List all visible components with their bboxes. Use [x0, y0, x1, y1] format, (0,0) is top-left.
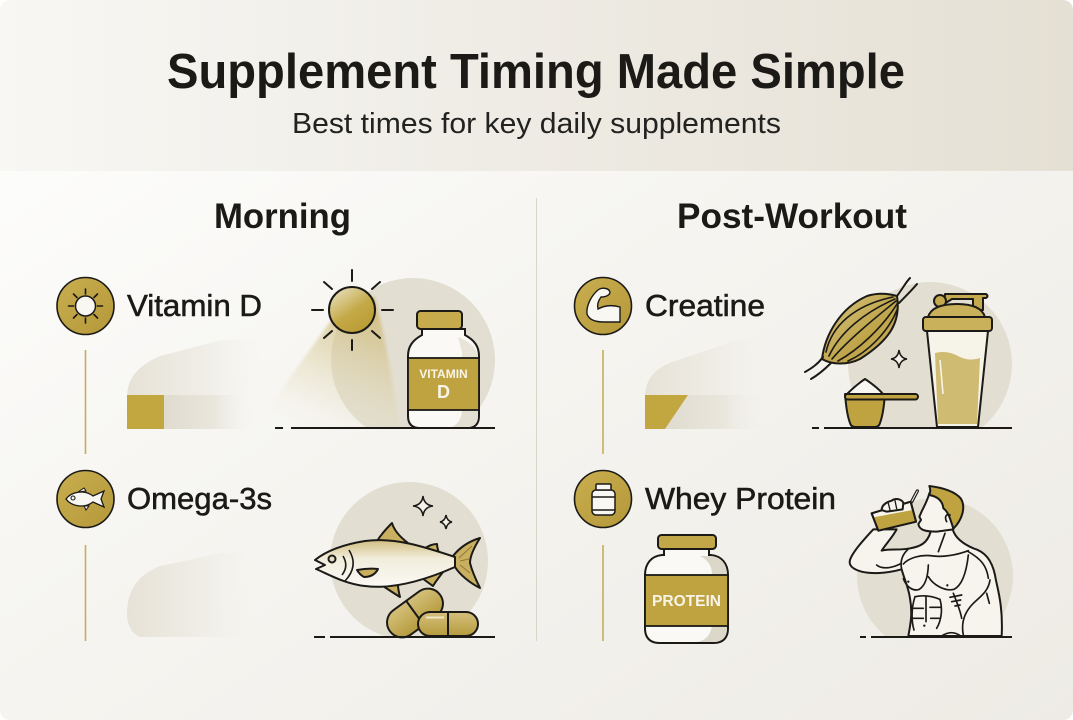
sparkle	[891, 350, 907, 368]
panel: Omega-3s	[57, 470, 495, 643]
header band	[0, 0, 1073, 171]
panel: Whey Protein	[574, 470, 1013, 654]
illustration: fish and capsules	[314, 482, 495, 643]
sparkles	[413, 496, 452, 529]
bottle label text: VITAMIN	[419, 367, 468, 381]
timeline line	[602, 545, 604, 641]
fish	[315, 523, 480, 597]
label: Creatine: Creatine	[645, 289, 765, 323]
column heading: Morning: Morning	[214, 197, 351, 236]
shaker bottle	[923, 294, 992, 427]
vitamin D bottle	[408, 311, 479, 428]
ground line	[275, 427, 495, 429]
face	[918, 493, 955, 532]
label: Vitamin D: Vitamin D	[127, 289, 262, 323]
icon: sun	[312, 270, 393, 350]
title: Supplement Timing Made Simple	[167, 45, 905, 99]
time of day bar	[127, 553, 258, 637]
muscle lines	[877, 515, 990, 636]
illustration: sun and vitamin D bottle	[268, 270, 495, 442]
icon: fish badge	[57, 470, 114, 528]
jar label text: PROTEIN	[652, 593, 721, 610]
timeline line	[84, 545, 86, 641]
protein jar	[645, 535, 728, 643]
panel: Vitamin D	[57, 270, 495, 454]
capsules	[381, 583, 478, 643]
hair	[929, 486, 963, 529]
illustration: muscle, scoop and shaker	[805, 278, 1012, 446]
panel: Creatine	[574, 278, 1012, 454]
subtitle: Best times for key daily supplements	[292, 108, 781, 140]
column heading: Post-Workout: Post-Workout	[677, 197, 907, 236]
icon: flexed arm badge	[574, 278, 632, 334]
ground line	[812, 427, 1012, 429]
label: Whey Protein: Whey Protein	[645, 482, 836, 516]
time of day bar	[645, 340, 778, 429]
shaker in hand	[912, 491, 917, 502]
muscle	[805, 278, 917, 379]
icon: sun badge	[57, 278, 114, 334]
icon: jar badge	[574, 470, 632, 528]
timeline line	[602, 350, 604, 454]
ground line	[314, 636, 495, 638]
ground line	[860, 636, 1012, 638]
powder scoop	[845, 379, 918, 427]
illustration: man drinking shake	[850, 486, 1013, 654]
vitamin D bottle: D	[437, 382, 450, 402]
label: Omega-3s: Omega-3s	[127, 482, 272, 516]
torso and arms	[850, 523, 1002, 636]
time of day bar	[127, 340, 262, 429]
timeline line	[84, 350, 86, 454]
